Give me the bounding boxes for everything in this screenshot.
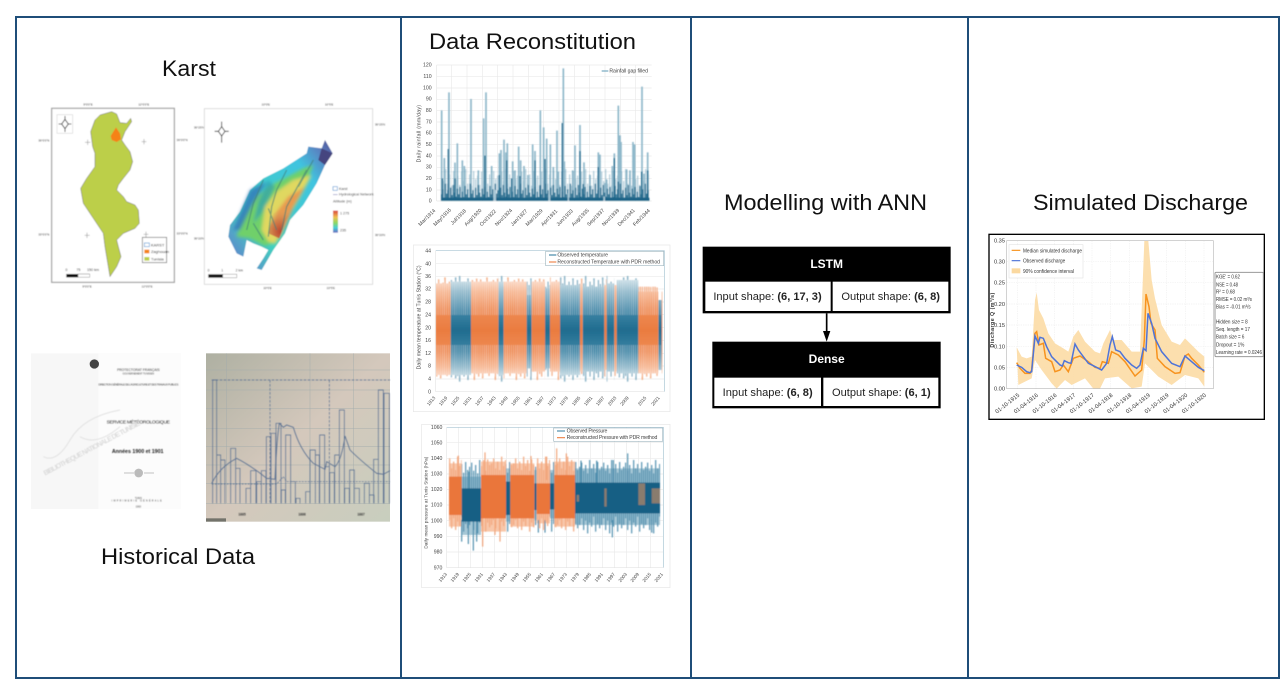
coordinates	[194, 103, 385, 290]
rainfall x axis: Dec/1941	[617, 208, 637, 228]
image: scanned meteorological report cover: GOUVERNEMENT TUNISIEN	[123, 373, 154, 375]
temperature series	[436, 270, 662, 383]
discharge legend	[1009, 245, 1083, 278]
temperature x axis: 1997	[595, 395, 606, 407]
temperature x axis: 1943	[486, 395, 497, 407]
pressure y axis: 1020	[431, 487, 442, 493]
pressure y axis: 1050	[431, 440, 442, 446]
temperature x axis: 1991	[583, 395, 594, 407]
discharge legend: Median simulated discharge	[1023, 248, 1082, 254]
flow curve	[212, 423, 390, 483]
median simulated discharge	[1017, 294, 1204, 376]
temperature x axis: 1925	[450, 395, 461, 407]
pressure x axis: 2003	[618, 572, 628, 583]
scale bar: 0	[208, 269, 210, 273]
rainfall x axis: Aug/1920	[464, 208, 483, 228]
rainfall y axis: 40	[426, 153, 432, 159]
metrics box: RMSE = 0.02 m³/s	[1216, 297, 1252, 303]
panel: simulated discharge	[968, 17, 1279, 678]
legend: 1 275	[340, 211, 349, 215]
legend: 235	[340, 228, 346, 232]
rainfall y axis: 20	[426, 176, 432, 182]
pressure x axis: 1997	[606, 572, 616, 583]
rainfall x axis: Apr/1931	[540, 209, 559, 228]
orange reconstructed pressure	[449, 448, 575, 547]
compass	[215, 122, 229, 143]
temperature x axis: 1985	[571, 395, 582, 407]
rainfall x axis: Nov/1939	[601, 208, 621, 228]
discharge x axis: 01-04-1920	[1163, 393, 1189, 415]
legend: Karst	[339, 187, 348, 191]
temperature y axis: 12	[425, 351, 431, 357]
coordinates	[38, 103, 188, 289]
temperature y axis: 8	[428, 364, 431, 370]
elevation surface	[228, 140, 333, 270]
temperature x axis: 1973	[547, 395, 557, 407]
pressure x axis: 1919	[450, 572, 460, 583]
pressure y label: Daily mean pressure at Tunis Station (hPa)	[424, 456, 429, 549]
metrics box: R² = 0.68	[1216, 290, 1235, 296]
rainfall x axis	[418, 207, 652, 228]
rainfall y axis: 10	[426, 187, 432, 193]
image: scanned meteorological report cover: 1903	[136, 506, 142, 508]
coordinates: 36°0'0"N	[177, 138, 188, 142]
temperature legend: Reconstructed Temperature with PDR method	[557, 260, 660, 266]
discharge y axis: 0.15	[994, 323, 1005, 329]
coordinates: 36°25'N	[194, 126, 204, 130]
coordinates: 10°0'E	[263, 286, 272, 290]
pressure x axis: 1913	[438, 572, 448, 583]
image: scanned meteorological report cover: PROTECTORAT FRANÇAIS	[117, 368, 160, 372]
pressure legend: Reconstructed Pressure with PDR method	[567, 435, 657, 441]
LSTM block: LSTM	[810, 257, 843, 271]
temperature y axis: 32	[425, 287, 431, 293]
image: historical hand-drawn hydrograph: 1885	[238, 513, 246, 517]
LSTM block: Input shape: (6, 17, 3)	[713, 291, 822, 303]
temperature x axis: 1919	[438, 395, 449, 407]
base rainfall bars	[441, 172, 649, 201]
heading: Data Reconstitution: Data Reconstitution	[429, 29, 636, 54]
discharge legend: 90% confidence interval	[1023, 269, 1074, 275]
rainfall y axis: 50	[426, 142, 432, 148]
dark rainfall spikes	[442, 123, 648, 201]
temperature x axis: 2009	[619, 395, 630, 407]
blue temperature tips	[451, 270, 662, 383]
pressure x axis: 1931	[474, 572, 484, 583]
pressure x axis: 1985	[582, 572, 592, 583]
arrow: LSTM to Dense	[823, 313, 830, 342]
watermark: BIBLIOTHEQUE NATIONALE DE TUNISIE	[43, 420, 142, 477]
pressure x axis: 1961	[534, 572, 544, 583]
pressure x axis: 1955	[522, 572, 532, 583]
pressure x axis: 1949	[510, 572, 520, 583]
discharge x axis: 01-10-1919	[1144, 393, 1170, 415]
Dense block: Dense	[809, 352, 845, 366]
temperature x axis: 1955	[510, 395, 521, 407]
pressure x axis: 1943	[498, 572, 508, 583]
map legend: KARST	[151, 242, 165, 247]
discharge y axis: 0.10	[994, 344, 1005, 350]
discharge x axis: 01-10-1916	[1032, 393, 1058, 415]
confidence band	[1017, 241, 1204, 389]
coordinates: 36°25'N	[375, 122, 385, 126]
bars	[213, 380, 389, 503]
crosshairs	[85, 139, 148, 238]
temperature y axis: 44	[425, 248, 431, 254]
rainfall x axis: Sep/1937	[586, 208, 606, 228]
temperature x axis: 1931	[462, 395, 473, 407]
rainfall y axis	[423, 63, 432, 205]
discharge x axis	[995, 393, 1208, 415]
discharge y axis	[994, 239, 1005, 393]
metrics box: Batch size = 6	[1216, 335, 1244, 341]
rainfall y axis: 60	[426, 131, 432, 137]
rainfall x axis: Jul/1918	[450, 208, 468, 226]
scale bar	[208, 269, 243, 278]
image: historical hand-drawn hydrograph: 1886	[298, 513, 306, 517]
metrics box: Bias = -0.01 m³/s	[1216, 304, 1251, 310]
pressure x axis	[438, 572, 664, 583]
temperature x axis: 2003	[607, 395, 618, 407]
Zaghouan region	[111, 127, 121, 142]
Dense block: Input shape: (6, 8)	[723, 387, 813, 399]
map: elevation of Zaghouan karst	[194, 103, 385, 290]
rainfall y axis: 90	[426, 97, 432, 103]
rainfall x axis: Jan/1927	[510, 208, 529, 228]
metrics box: Hidden size = 8	[1216, 319, 1248, 325]
scale bar: 150 km	[87, 268, 99, 272]
Dense block	[712, 342, 941, 408]
mid rainfall mass	[441, 162, 649, 201]
orange reconstructed temperature body	[436, 282, 662, 375]
temperature x axis: 1913	[426, 395, 437, 407]
temperature x axis: 1937	[474, 395, 485, 407]
temperature y label: Daily mean temperature at Tunis Station (°C)	[417, 265, 423, 369]
discharge y axis: 0.00	[994, 387, 1005, 393]
discharge x axis: 01-04-1916	[1013, 393, 1040, 415]
rainfall y label: Daily rainfall (mm/day)	[417, 105, 423, 162]
rainfall y axis: 70	[426, 119, 432, 125]
diagram: network architecture	[703, 247, 951, 408]
pressure y axis	[431, 425, 442, 571]
scale bar	[65, 268, 99, 277]
pressure y axis: 970	[434, 565, 442, 571]
heading: Historical Data: Historical Data	[101, 544, 256, 569]
temperature legend	[546, 251, 664, 266]
discharge x axis: 01-10-1918	[1107, 393, 1133, 415]
temperature legend: Observed temperature	[557, 253, 608, 259]
chart: simulated vs observed discharge	[989, 234, 1264, 419]
image: scanned meteorological report cover	[31, 353, 181, 509]
temperature y axis: 24	[425, 312, 431, 318]
pressure x axis: 1937	[486, 572, 496, 583]
legend: Altitude (m)	[333, 199, 352, 203]
coordinates: 9°0'0"E	[82, 285, 92, 289]
pressure x axis: 1973	[558, 572, 568, 583]
pressure x axis: 2009	[630, 572, 640, 583]
rainfall x axis: Oct/1922	[479, 209, 498, 228]
chart: daily mean pressure	[422, 424, 670, 588]
discharge y axis: 0.05	[994, 365, 1005, 371]
pressure legend: Observed Pressure	[567, 429, 607, 435]
pressure x axis: 2021	[654, 572, 664, 583]
coordinates: 33°0'0"N	[38, 232, 49, 236]
metrics box: NSE = 0.48	[1216, 282, 1238, 288]
pressure legend	[554, 428, 663, 441]
legend	[333, 187, 374, 233]
light rainfall spikes	[442, 68, 648, 201]
scale bar: 75	[76, 268, 80, 272]
panel: karst and historical data	[16, 17, 401, 678]
rainfall x axis: May/1916	[433, 207, 453, 228]
pressure x axis: 1967	[546, 572, 556, 583]
scale bar: 2 km	[236, 269, 243, 273]
discharge y axis: 0.25	[994, 281, 1005, 287]
panel: data reconstitution	[401, 17, 691, 678]
temperature x axis: 1961	[523, 395, 533, 407]
discharge x axis: 01-04-1919	[1125, 393, 1152, 415]
temperature y axis: 28	[425, 300, 431, 306]
discharge legend: Observed discharge	[1023, 259, 1065, 265]
discharge x axis: 01-10-1915	[995, 393, 1021, 415]
coordinates: 36°0'0"N	[38, 139, 49, 143]
pressure y axis: 1060	[431, 425, 442, 431]
pressure core	[462, 482, 660, 522]
coordinates: 10°5'E	[327, 286, 335, 290]
pressure series	[449, 448, 660, 552]
blue observed pressure	[462, 453, 660, 552]
pressure y axis: 980	[434, 550, 442, 556]
pressure x axis: 1925	[462, 572, 472, 583]
LSTM block	[703, 247, 951, 313]
discharge y label: Discharge Q (m³/s)	[990, 292, 996, 348]
discharge x axis: 01-10-1917	[1069, 393, 1096, 415]
orange temperature tips	[436, 270, 658, 383]
blue observed temperature body	[451, 280, 662, 375]
Tunisia outline	[81, 112, 139, 277]
panel: modelling with ANN	[691, 17, 968, 678]
rainfall y axis: 120	[423, 63, 432, 69]
heading: Karst: Karst	[162, 56, 216, 81]
image: scanned meteorological report cover: SERVICE MÉTÉOROLOGIQUE	[107, 418, 171, 425]
coordinates: 12°0'0"E	[138, 103, 149, 107]
metrics box: Learning rate = 0.0246	[1216, 350, 1262, 356]
discharge x axis: 01-10-1920	[1181, 393, 1208, 415]
legend: Hydrological Network	[339, 193, 374, 197]
image: scanned meteorological report cover: DIRECTION GÉNÉRALE DE L'AGRICULTURE ET DES TRAVAUX PUBLICS	[98, 382, 178, 387]
image: historical hand-drawn hydrograph	[206, 353, 390, 522]
rainfall x axis: Aug/1935	[571, 208, 591, 228]
metrics box: KGE' = 0.62	[1216, 275, 1240, 281]
pressure y axis: 1030	[431, 472, 442, 478]
pressure y axis: 990	[434, 534, 442, 540]
image: scanned meteorological report cover: IMPRIMERIE GÉNÉRALE	[112, 500, 162, 503]
coordinates: 12°0'0"E	[142, 285, 153, 289]
scale bar: 0	[65, 268, 67, 272]
observed discharge	[1017, 313, 1204, 373]
temperature x axis: 1949	[498, 395, 509, 407]
LSTM block: Output shape: (6, 8)	[841, 291, 940, 303]
map legend: Zaghouan	[151, 249, 169, 254]
rainfall y axis: 100	[423, 85, 432, 91]
Dense block: Output shape: (6, 1)	[832, 387, 931, 399]
chart: daily mean temperature	[413, 245, 670, 412]
temperature y axis: 20	[425, 325, 431, 331]
temperature y axis: 4	[428, 376, 431, 382]
compass	[57, 115, 73, 133]
coordinates: 9°0'0"E	[83, 103, 93, 107]
coordinates: 10°0'E	[262, 103, 270, 107]
temperature y axis: 36	[425, 274, 431, 280]
coordinates: 10°5'E	[325, 103, 333, 107]
rainfall x axis: Nov/1924	[494, 208, 514, 228]
image: scanned meteorological report cover: TUNIS	[135, 498, 142, 500]
rainfall x axis: Mar/1914	[418, 208, 437, 228]
temperature x axis	[426, 395, 661, 407]
map: Tunisia location	[38, 103, 188, 289]
rainfall y axis: 30	[426, 165, 432, 171]
pressure x axis: 1979	[570, 572, 580, 583]
rainfall x axis: Jun/1933	[556, 208, 575, 228]
map legend: Tunisia	[151, 256, 164, 261]
rainfall series	[441, 68, 649, 201]
metrics box	[1215, 272, 1263, 357]
coordinates: 36°20'N	[194, 236, 204, 240]
annual stripe texture	[436, 280, 662, 377]
rainfall y axis: 80	[426, 108, 432, 114]
chart: daily rainfall	[417, 63, 652, 228]
temperature x axis: 1967	[535, 395, 545, 407]
pressure y axis: 1000	[431, 518, 442, 524]
heading: Modelling with ANN: Modelling with ANN	[724, 190, 927, 215]
heading: Simulated Discharge: Simulated Discharge	[1033, 190, 1248, 215]
pressure y axis: 1010	[431, 503, 442, 509]
discharge y axis: 0.20	[994, 302, 1005, 308]
rainfall x axis: Feb/1944	[632, 208, 652, 228]
rainfall y axis: 110	[423, 74, 432, 80]
map legend	[142, 237, 169, 263]
image: scanned meteorological report cover: Années 1900 et 1901	[112, 449, 164, 455]
pressure y axis: 1040	[431, 456, 442, 462]
temperature y axis: 16	[425, 338, 431, 344]
pressure x axis: 2015	[642, 572, 652, 583]
temperature y axis	[425, 248, 431, 395]
metrics box: Seq. length = 17	[1216, 327, 1250, 333]
temperature y axis: 0	[428, 389, 431, 395]
discharge x axis: 01-04-1918	[1088, 393, 1114, 415]
rainfall x axis: Mar/1929	[525, 208, 545, 228]
discharge y axis: 0.35	[994, 239, 1005, 245]
coordinates: 33°0'0"N	[177, 231, 188, 235]
discharge y axis: 0.30	[994, 260, 1005, 266]
image: historical hand-drawn hydrograph: 1887	[357, 513, 365, 517]
pale pressure envelope	[462, 468, 660, 535]
temperature x axis: 2015	[637, 395, 648, 407]
rainfall legend: Rainfall gap filled	[609, 69, 648, 75]
temperature x axis: 1979	[559, 395, 569, 407]
rainfall y axis: 0	[429, 199, 432, 205]
temperature x axis: 2021	[650, 395, 661, 407]
metrics box: Dropout = 1%	[1216, 342, 1245, 348]
coordinates: 36°20'N	[375, 233, 385, 237]
temperature y axis: 40	[425, 261, 431, 267]
pressure x axis: 1991	[594, 572, 604, 583]
discharge x axis: 01-04-1917	[1051, 393, 1077, 415]
scale bar: 1	[221, 269, 223, 273]
